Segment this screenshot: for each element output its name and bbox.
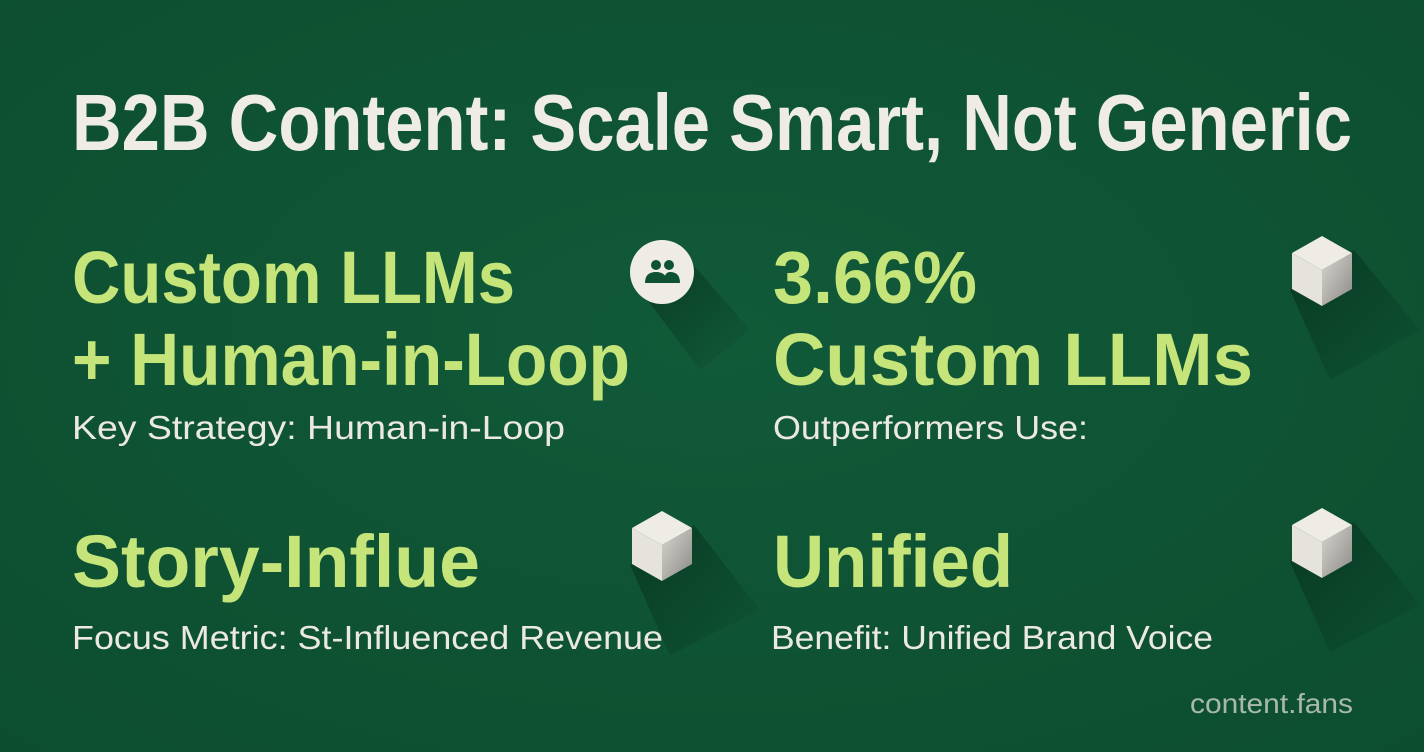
panel: custom llms human in loop: + Human-in-Loop [72, 318, 630, 401]
panel: custom llms human in loop: Custom LLMs [72, 236, 515, 319]
panel: story influe [72, 520, 663, 656]
panel: unified: Unified [773, 520, 1013, 603]
panel: 3.66% custom llms [773, 236, 1253, 446]
panel: unified [771, 520, 1213, 656]
panel: story influe: Story-Influe [72, 520, 480, 603]
icon: cube 1 [1290, 236, 1420, 380]
panel: 3.66% custom llms: 3.66% [773, 236, 977, 319]
panel: unified: Benefit: Unified Brand Voice [771, 619, 1213, 656]
footer brand: content.fans [1190, 688, 1353, 719]
icon: cube 3 [1290, 508, 1420, 652]
panel: custom llms human in loop [72, 236, 630, 446]
panel: 3.66% custom llms: Outperformers Use: [773, 409, 1088, 446]
panel: custom llms human in loop: Key Strategy: Human-in-Loop [72, 409, 565, 446]
icon: cube 2 [630, 511, 760, 655]
panel: 3.66% custom llms: Custom LLMs [773, 318, 1253, 401]
panel: story influe: Focus Metric: St-Influenced Revenue [72, 619, 663, 656]
icon: people circle [630, 240, 750, 370]
